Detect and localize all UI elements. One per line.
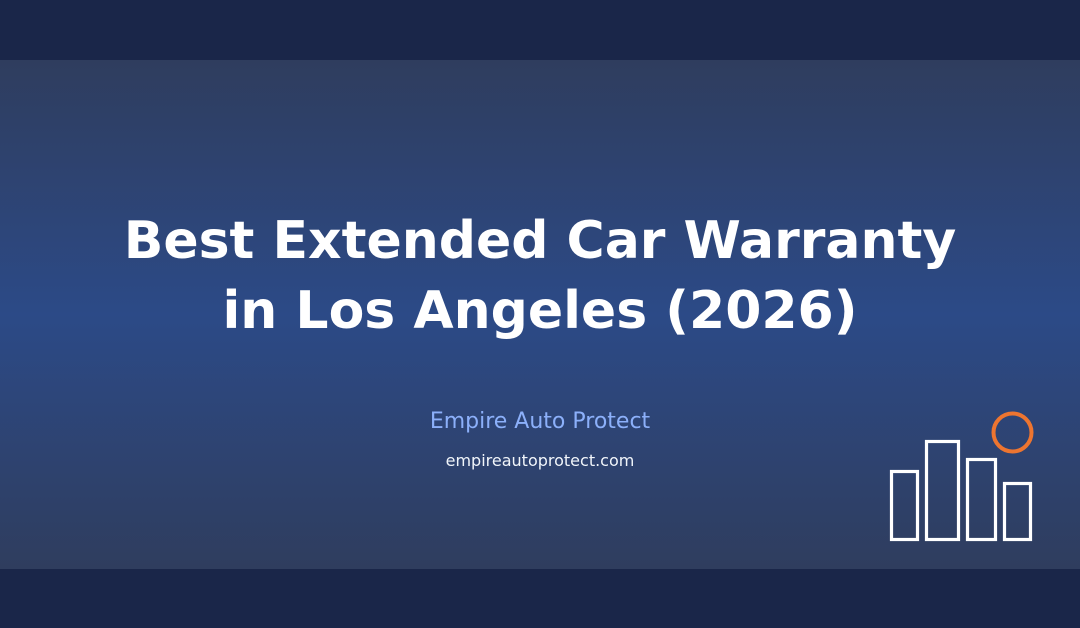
title: Best Extended Car Warranty: [124, 211, 956, 271]
bottom band: [0, 569, 1080, 628]
bar 1: [892, 472, 918, 540]
brand name: Empire Auto Protect: [430, 409, 651, 434]
title: [124, 211, 956, 341]
top band: [0, 0, 1080, 60]
bar 2: [926, 442, 958, 540]
bar 4: [1004, 484, 1030, 540]
bar 3: [968, 460, 996, 540]
website url: empireautoprotect.com: [446, 451, 634, 470]
title: in Los Angeles (2026): [222, 281, 858, 341]
orange circle: [994, 414, 1032, 452]
icon: bar chart with circle: [892, 414, 1032, 540]
